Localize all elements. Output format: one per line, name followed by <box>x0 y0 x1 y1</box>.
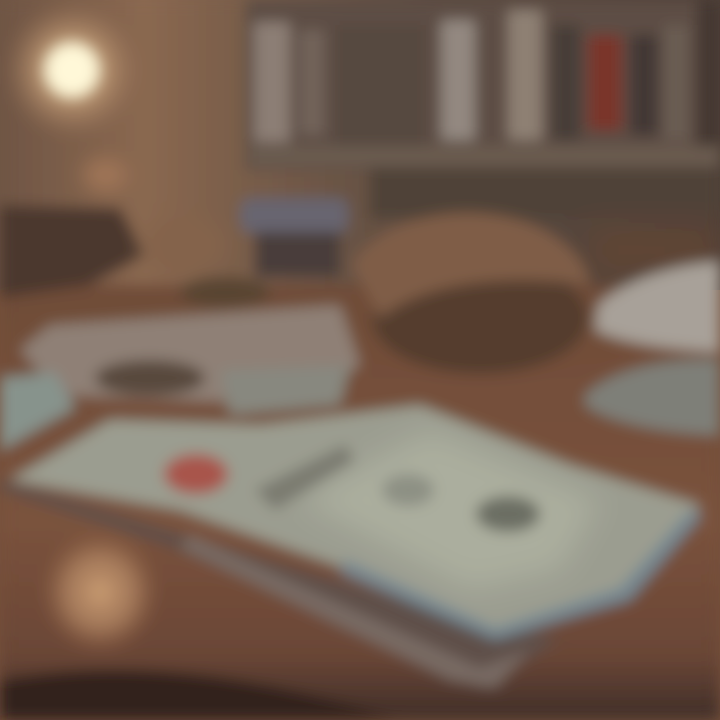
dark foreground edge <box>0 670 400 720</box>
table surface <box>0 285 720 720</box>
book: light centre <box>441 20 475 140</box>
right table dark band <box>618 224 720 271</box>
document sheet <box>10 405 700 630</box>
bowl body <box>370 282 590 377</box>
shelf board <box>250 146 720 166</box>
red mark <box>164 454 228 494</box>
book: red <box>588 35 622 130</box>
main document <box>0 405 702 688</box>
lamp core <box>46 44 98 96</box>
bowl top <box>352 213 590 318</box>
background wall <box>0 0 720 300</box>
tan object by left <box>143 217 227 273</box>
wicker bowl <box>352 213 590 374</box>
dark seal left <box>382 474 434 506</box>
blue-grey object <box>240 198 348 277</box>
blue sheet edge <box>340 510 702 640</box>
mid dark object <box>180 277 270 307</box>
bookshelf <box>245 0 720 218</box>
table reflection <box>46 536 155 650</box>
book: light left <box>254 22 290 142</box>
lamp glow <box>8 8 131 132</box>
book: light right <box>508 10 542 140</box>
lower strip <box>180 535 530 688</box>
papers left stack <box>0 305 360 450</box>
white dish right <box>585 262 720 435</box>
document shadow <box>2 482 549 666</box>
strip on document <box>255 445 355 510</box>
dark object left <box>0 205 145 298</box>
dark seal right <box>476 496 540 532</box>
small wall highlight <box>83 159 127 191</box>
light patch <box>320 435 589 586</box>
